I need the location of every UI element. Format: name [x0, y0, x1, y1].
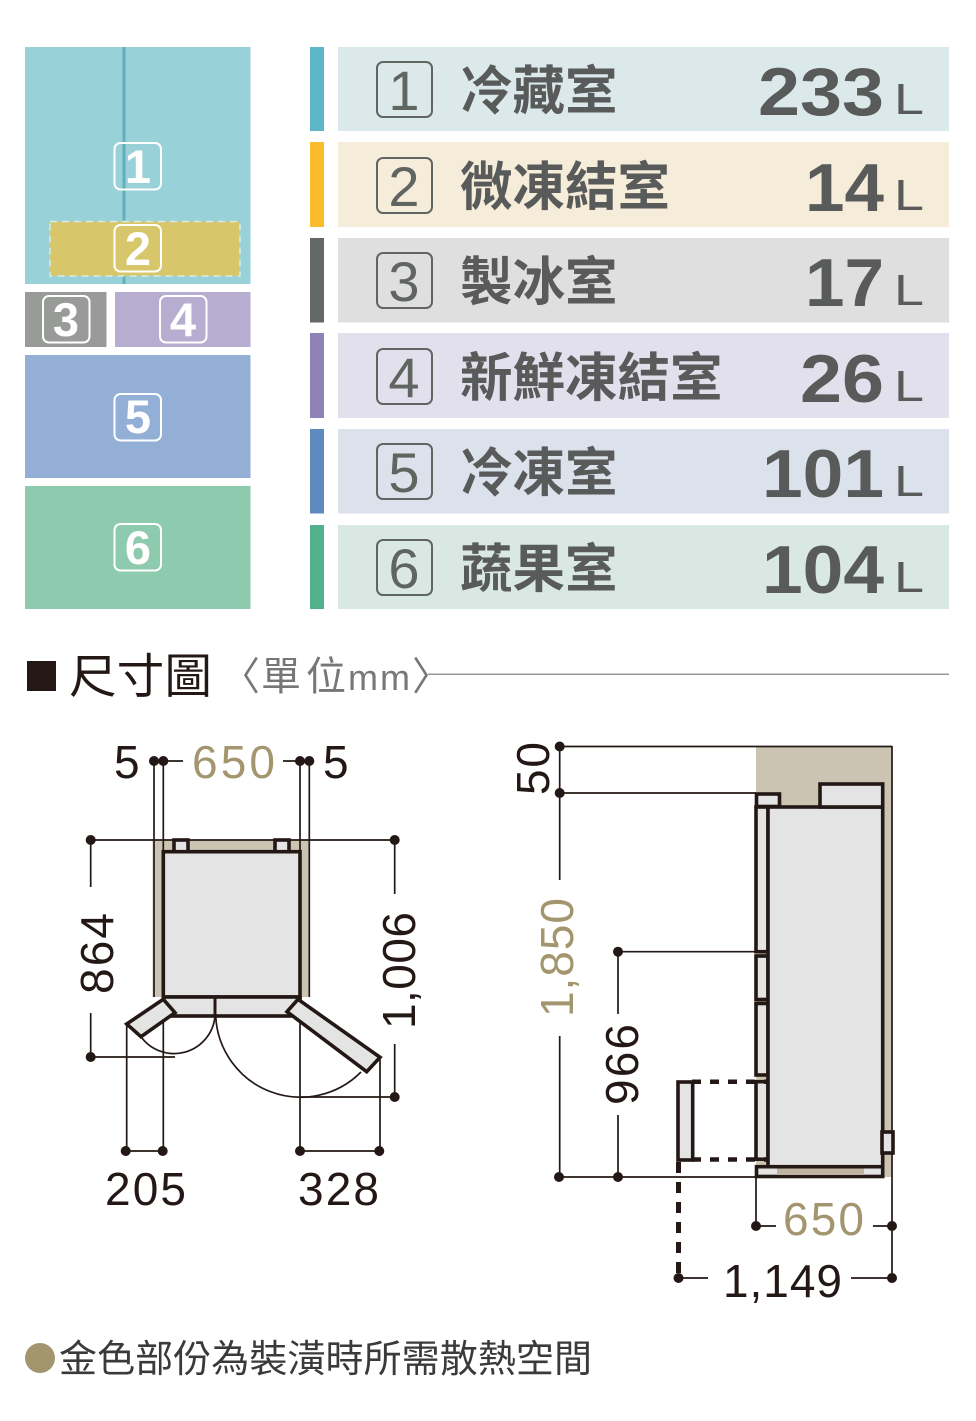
row 3: 製冰室 17 L: 3 — [388, 250, 420, 313]
diagram: top view: 328 — [298, 1163, 379, 1215]
row 5: 冷凍室 101 L: 冷凍室 — [460, 444, 618, 503]
row 5: 冷凍室 101 L — [310, 429, 949, 514]
row 1: 冷藏室 233 L: 233 — [758, 54, 884, 130]
row 1: 冷藏室 233 L: 1 — [388, 59, 420, 122]
row 1: 冷藏室 233 L: L — [894, 75, 924, 124]
diagram: side view: 50 — [507, 742, 559, 795]
row 2: 微凍結室 14 L: L — [894, 171, 924, 220]
panel: compartment map: 5 — [125, 390, 151, 443]
diagram: top view — [71, 736, 425, 1215]
row 6: 蔬果室 104 L: 104 — [762, 532, 884, 608]
row 1: 冷藏室 233 L: 冷藏室 — [460, 62, 618, 121]
panel: compartment map: 4 — [170, 293, 196, 346]
row 3: 製冰室 17 L: 17 — [805, 245, 884, 321]
row 5: 冷凍室 101 L: 5 — [388, 441, 420, 504]
heading: dimension diagram: 單位 — [261, 655, 346, 699]
row 4: 新鮮凍結室 26 L: L — [894, 362, 924, 411]
diagram: top view: 1,006 — [373, 912, 425, 1029]
panel: compartment map: 3 — [53, 293, 79, 346]
row 6: 蔬果室 104 L: 蔬果室 — [460, 540, 618, 599]
diagram: side view — [507, 742, 897, 1307]
heading: dimension diagram: 尺寸圖 — [69, 651, 212, 704]
row 2: 微凍結室 14 L: 2 — [388, 155, 420, 218]
row 5: 冷凍室 101 L: L — [894, 457, 924, 506]
heading: dimension diagram: 〉 — [412, 656, 451, 699]
diagram: side view: 966 — [596, 1024, 648, 1105]
diagram: top view: 5 — [323, 736, 349, 788]
row 5: 冷凍室 101 L: 101 — [762, 436, 884, 512]
row 3: 製冰室 17 L: L — [894, 266, 924, 315]
row 6: 蔬果室 104 L: 6 — [388, 537, 420, 600]
row 2: 微凍結室 14 L: 14 — [805, 150, 884, 226]
row 3: 製冰室 17 L — [310, 238, 949, 322]
row 1: 冷藏室 233 L — [310, 47, 949, 131]
panel: compartment map — [25, 47, 250, 609]
heading: dimension diagram — [27, 651, 949, 704]
row 4: 新鮮凍結室 26 L: 新鮮凍結室 — [460, 349, 723, 408]
diagram: top view: 650 — [192, 736, 275, 788]
diagram: top view: 205 — [105, 1163, 186, 1215]
row 6: 蔬果室 104 L: L — [894, 553, 924, 602]
diagram: top view: 864 — [71, 913, 123, 994]
diagram: top view: 5 — [114, 736, 140, 788]
heading: dimension diagram: mm — [348, 657, 410, 698]
heading: dimension diagram: 〈 — [221, 656, 260, 699]
panel: compartment map: 1 — [125, 140, 151, 193]
diagram: side view: 650 — [783, 1193, 864, 1245]
panel: compartment map: 6 — [125, 521, 151, 574]
legend: gold clearance note: 金色部份為裝潢時所需散熱空間 — [59, 1339, 592, 1381]
row 4: 新鮮凍結室 26 L — [310, 333, 949, 418]
diagram: side view: 1,149 — [723, 1255, 842, 1307]
diagram: side view: 1,850 — [531, 898, 583, 1017]
row 6: 蔬果室 104 L — [310, 525, 949, 609]
row 2: 微凍結室 14 L — [310, 142, 949, 227]
row 4: 新鮮凍結室 26 L: 4 — [388, 346, 420, 409]
row 3: 製冰室 17 L: 製冰室 — [460, 253, 618, 312]
row 4: 新鮮凍結室 26 L: 26 — [800, 341, 884, 417]
compartment 2 zone — [50, 222, 240, 276]
panel: compartment map: 2 — [125, 222, 151, 275]
row 2: 微凍結室 14 L: 微凍結室 — [460, 158, 670, 217]
